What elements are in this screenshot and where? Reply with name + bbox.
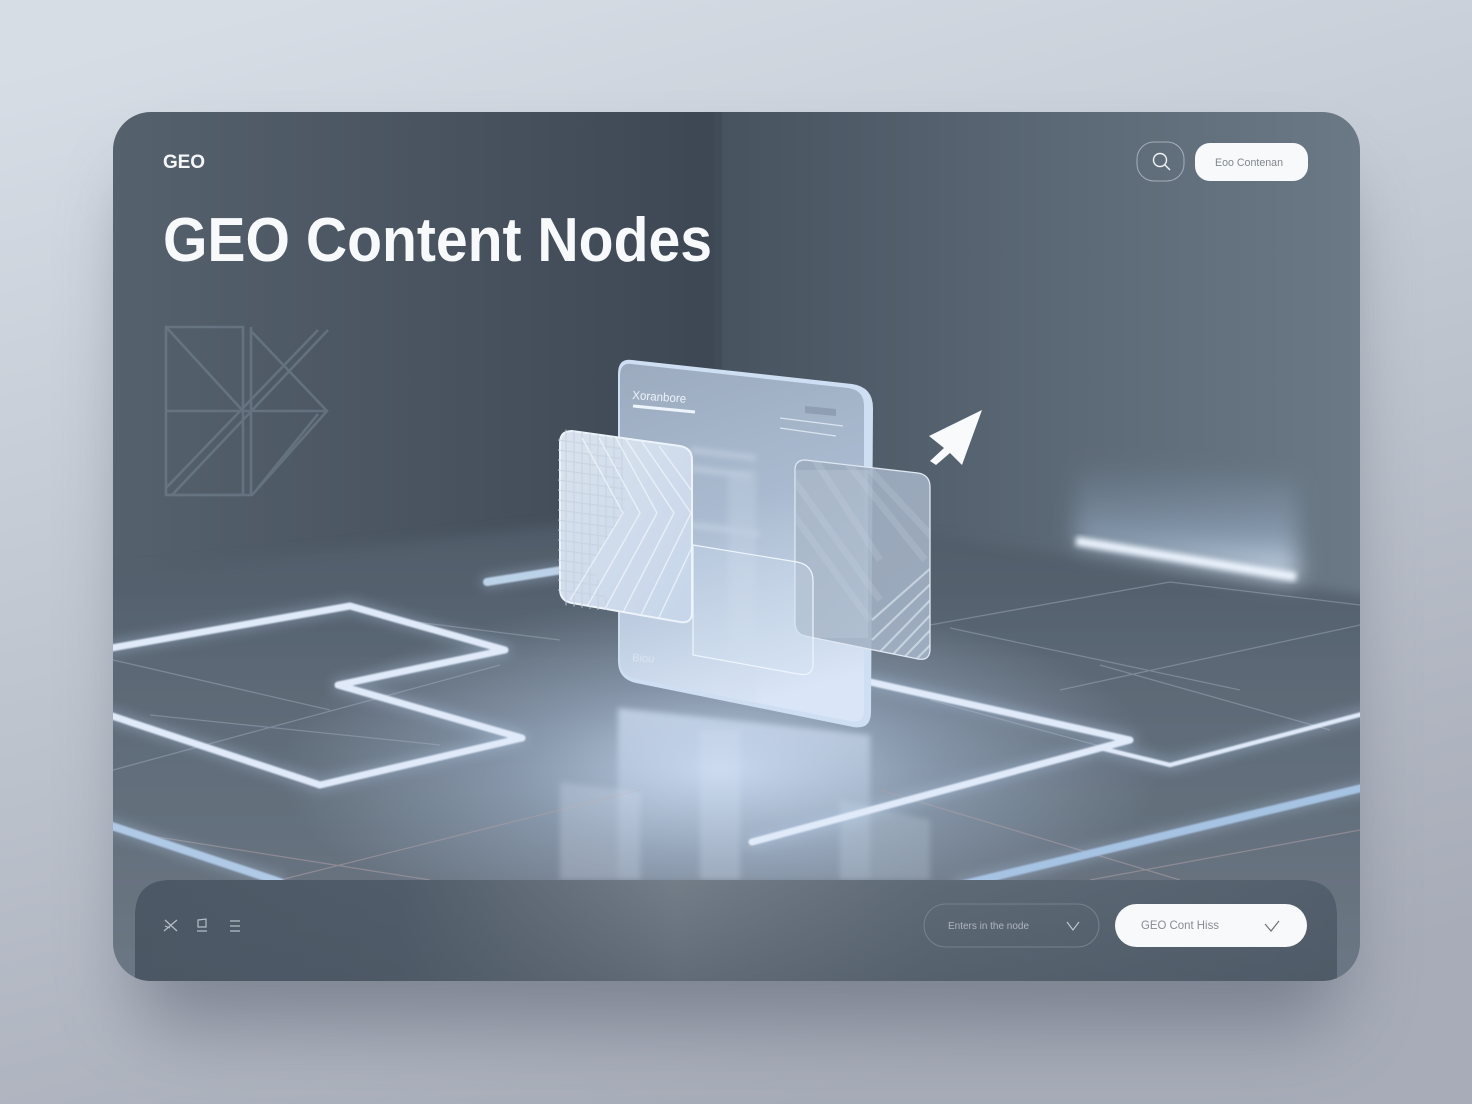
panel small tag	[805, 406, 836, 416]
dropdown: outline	[924, 904, 1099, 947]
icon: pointer arrow	[929, 410, 982, 465]
icon: menu	[230, 921, 240, 931]
floor light reflection under glass	[560, 708, 930, 880]
right wall	[722, 112, 1360, 600]
panel heading text: Xoranbore	[632, 388, 687, 406]
icon: cross tools	[164, 920, 177, 931]
glass panel: main window	[618, 360, 873, 727]
action button: Eoo Contenan	[1215, 157, 1283, 169]
chevron pattern	[570, 438, 691, 618]
inner glass window	[693, 545, 813, 675]
floor light pool	[322, 615, 1117, 880]
panel footer label: Biou	[632, 652, 655, 666]
pixel grid texture	[558, 425, 625, 610]
wall corner shading	[720, 114, 721, 368]
dropdown: filled: GEO Cont Hiss	[1141, 918, 1219, 932]
dropdown: filled	[1115, 904, 1307, 947]
glow halo	[100, 570, 1370, 885]
left wall	[113, 112, 715, 580]
toolbar icons	[164, 919, 240, 931]
bottom toolbar	[135, 880, 1337, 981]
panel: hero card	[113, 112, 1360, 981]
dropdown: outline: Enters in the node	[948, 921, 1029, 932]
floor grid lines	[113, 582, 1360, 770]
panel edge thickness	[618, 360, 873, 727]
lower floor tinted lines	[113, 790, 1360, 880]
blurred content inside	[690, 447, 758, 542]
glass card: right hatched	[794, 459, 931, 660]
icon: wireframe geometric mark	[166, 327, 328, 495]
panel heading underline	[633, 406, 695, 412]
bright strokes	[100, 570, 1370, 885]
card drop shadow	[135, 175, 1340, 1025]
action button	[1195, 143, 1308, 181]
panel small lines	[780, 418, 843, 436]
wall light glow	[1075, 455, 1298, 582]
floor	[113, 526, 1360, 980]
panel face	[620, 364, 864, 722]
brand label: GEO	[163, 152, 205, 173]
icon: search button	[1137, 142, 1184, 181]
glass overlap of main panel over right card	[795, 470, 868, 638]
glass card: left patterned	[558, 430, 693, 624]
icon: device	[197, 919, 207, 931]
title: GEO Content Nodes	[163, 206, 712, 275]
neon outline paths	[100, 570, 1370, 885]
